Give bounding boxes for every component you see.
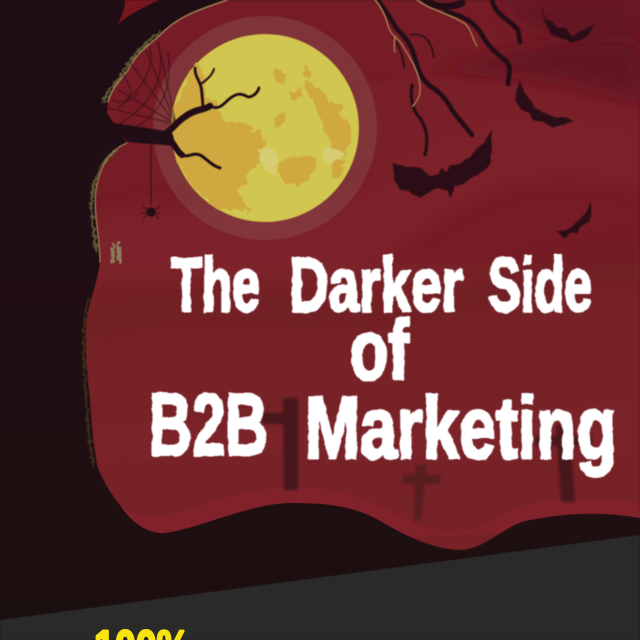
moon craters [173,62,349,210]
cobweb [108,42,176,128]
tree branch [108,68,259,168]
bat: small lower [557,202,592,238]
bat: middle [516,80,573,128]
cross: center [403,465,440,520]
title: B2B [149,375,268,474]
red sky panel [60,0,640,550]
title: The [171,243,260,328]
bat: top right [541,7,595,43]
title: of [350,303,410,397]
lower grey section [0,535,640,640]
lighter ground band [120,488,640,538]
moon [162,25,368,231]
spider [141,140,161,219]
mossy edge of cave [84,0,227,467]
sky bands [60,0,640,545]
moon disc [171,34,359,222]
title [149,243,617,477]
title: Darker [289,243,463,328]
bats [392,7,595,238]
graveyard crosses [262,398,592,520]
moon halo [162,25,368,231]
bat: large [392,130,492,198]
cross: right [535,425,592,502]
top corner red shape [118,0,160,24]
hanging branches [375,0,520,155]
cross: large [262,398,298,490]
